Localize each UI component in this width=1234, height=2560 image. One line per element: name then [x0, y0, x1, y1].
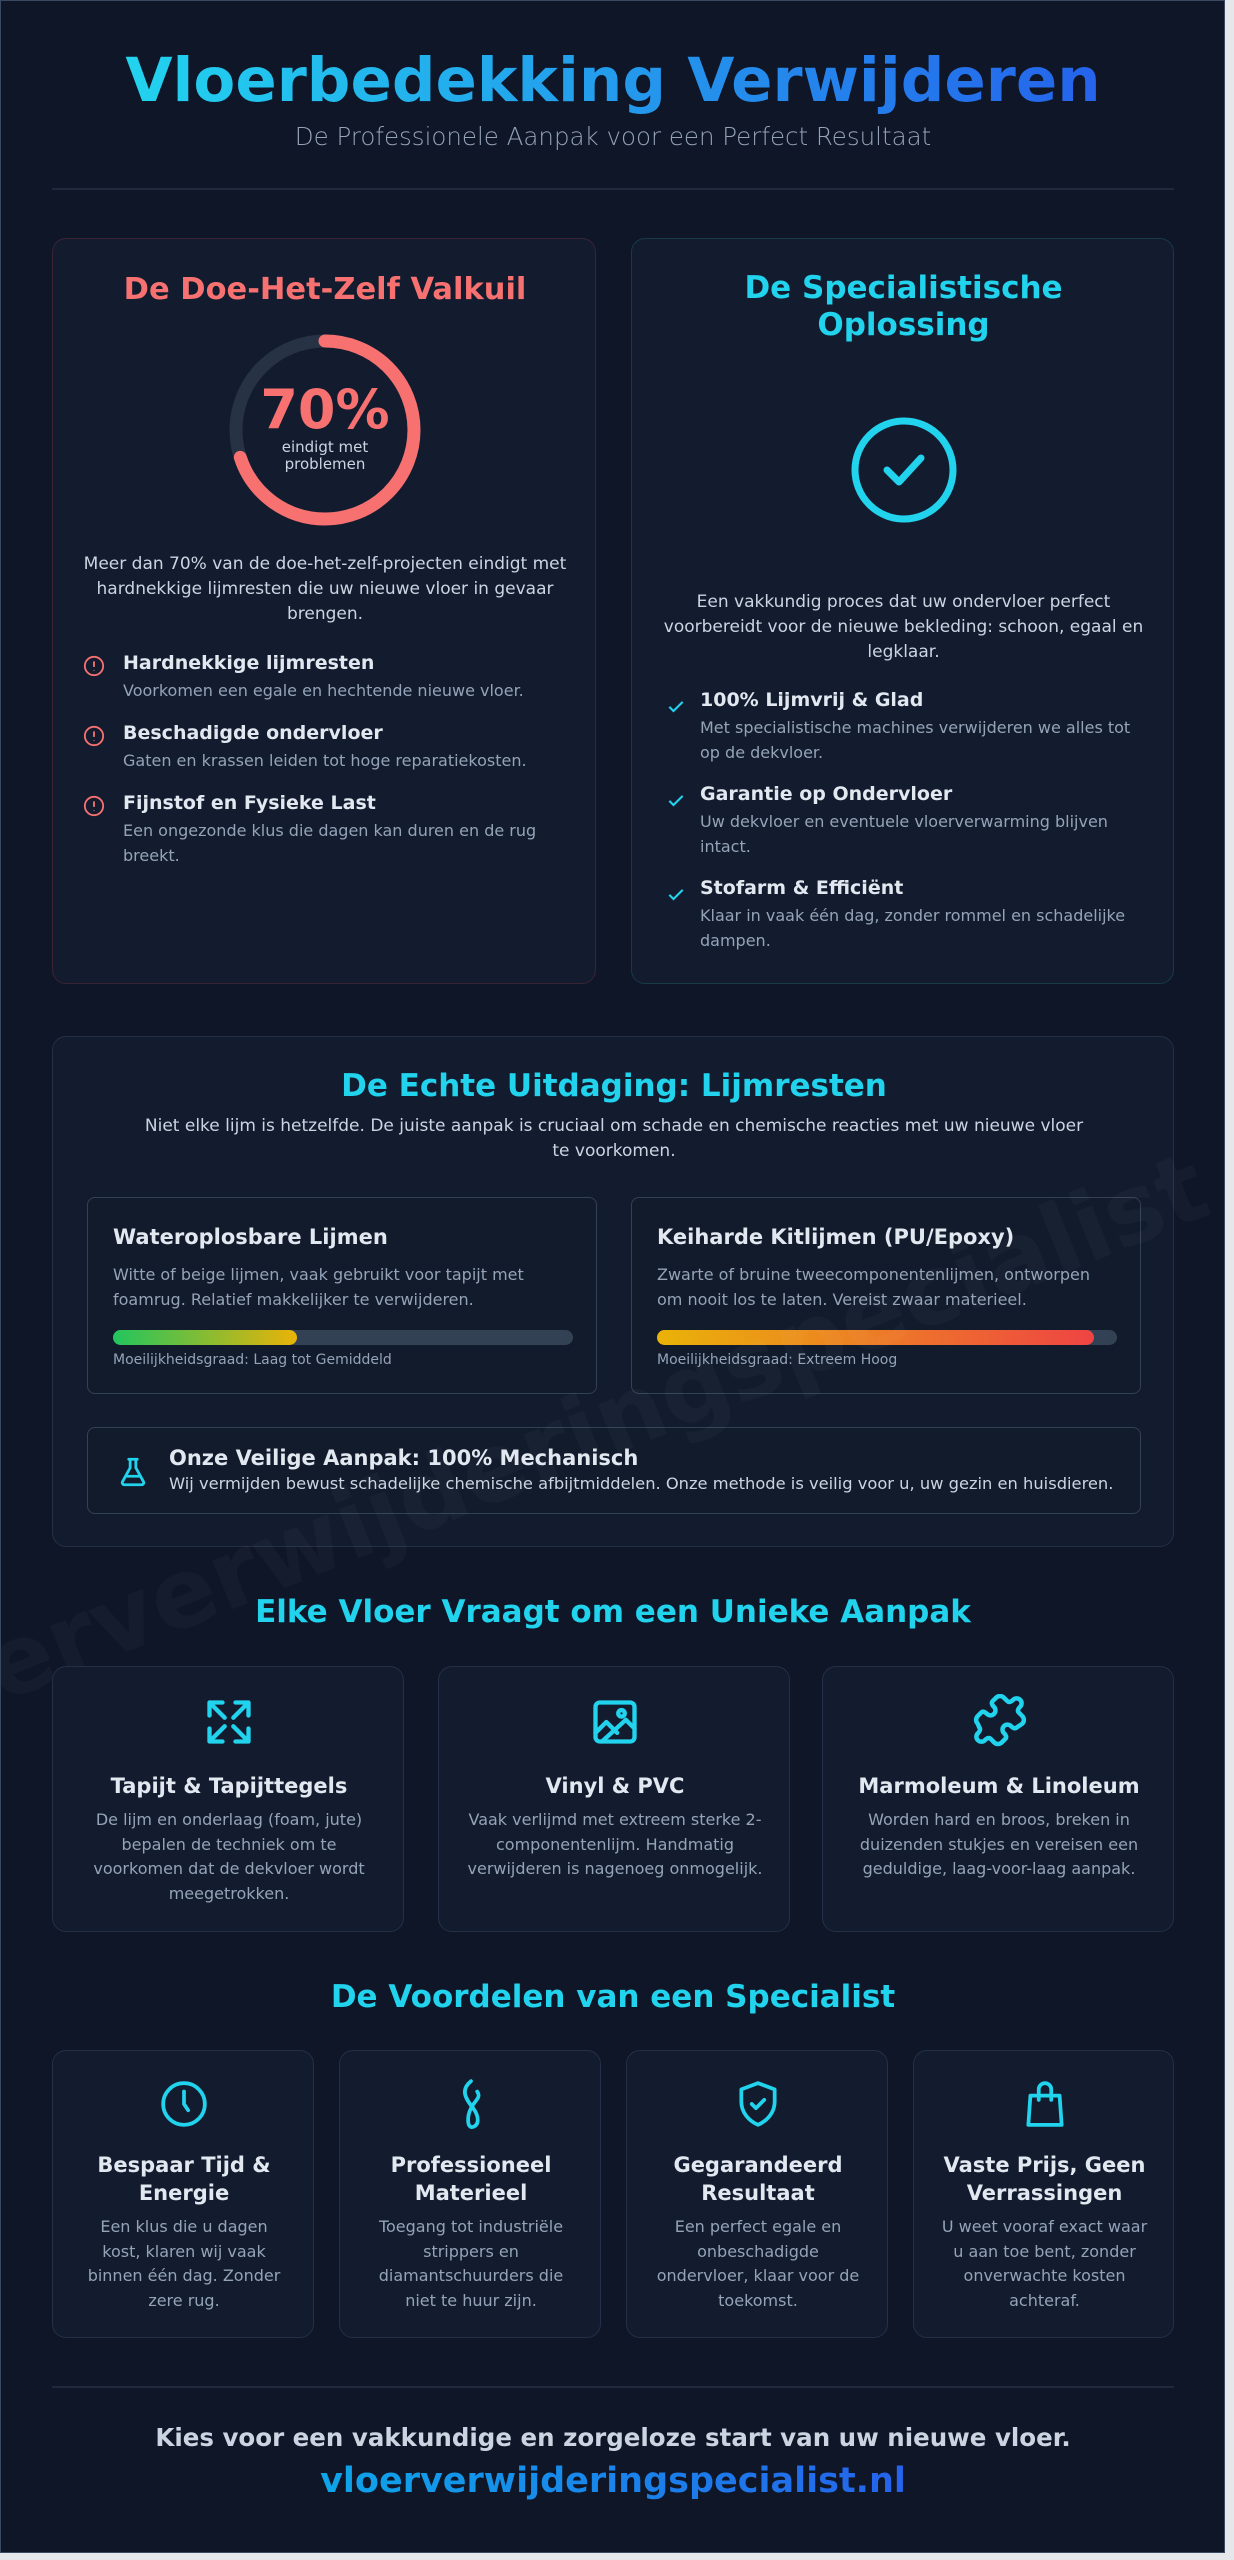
card: prijs: u aan toe bent, zonder — [953, 2242, 1136, 2260]
callout: mechanical approach: Onze Veilige Aanpak: 100% Mechanisch — [169, 1446, 638, 1470]
card: prijs: Vaste Prijs, Geen — [944, 2153, 1145, 2177]
list: DIY problems: Fijnstof en Fysieke Last — [123, 792, 376, 814]
card: tijd: Bespaar Tijd & — [97, 2153, 271, 2177]
card: vinyl: Vinyl & PVC — [546, 1774, 684, 1798]
card: resultaat: Een perfect egale en — [675, 2217, 841, 2236]
card: materieel: niet te huur zijn. — [405, 2290, 537, 2310]
icon: shopping bag — [1026, 2081, 1064, 2127]
bar: extreme difficulty — [657, 1330, 1117, 1345]
chart: 70% ring: 70% — [260, 378, 390, 441]
card: materieel: diamantschuurders die — [379, 2266, 563, 2285]
list: benefits: Garantie op Ondervloer — [700, 783, 952, 805]
card: tijd: binnen één dag. Zonder — [88, 2266, 280, 2285]
list: benefits: 100% Lijmvrij & Glad — [700, 689, 923, 711]
icon: tool — [463, 2079, 480, 2129]
icon: check circle — [852, 418, 956, 522]
card: water-soluble: Moeilijkheidsgraad: Laag tot Gemiddeld — [113, 1352, 392, 1368]
icon: flask — [120, 1458, 146, 1486]
card: materieel: Materieel — [415, 2181, 527, 2205]
panel: DIY pitfall — [52, 238, 596, 984]
panel: specialist solution — [631, 238, 1174, 984]
item: stofarm — [668, 877, 1125, 950]
list: benefits: Met specialistische machines verwijderen we alles tot op de dekvloer. — [700, 718, 1130, 762]
card: prijs: onverwachte kosten — [964, 2266, 1125, 2285]
list: benefits — [668, 689, 1130, 950]
item: lijmvrij — [668, 689, 1130, 762]
card: materieel — [339, 2050, 601, 2338]
card: marmoleum: Marmoleum & Linoleum — [858, 1774, 1140, 1798]
footer tagline: Kies voor een vakkundige en zorgeloze start van uw nieuwe vloer. — [155, 2423, 1071, 2452]
subtitle: De Professionele Aanpak voor een Perfect Resultaat — [295, 122, 931, 151]
item: fijnstof — [84, 792, 536, 865]
card: marmoleum: Worden hard en broos, breken in duizenden stukjes en vereisen een geduldige, laag-voor-laag aanpak. — [860, 1810, 1138, 1878]
list: DIY problems: Gaten en krassen leiden tot hoge reparatiekosten. — [123, 751, 527, 770]
card: tijd: kost, klaren wij vaak — [102, 2242, 266, 2260]
card: materieel: Professioneel — [391, 2153, 551, 2177]
chart: 70% ring — [230, 334, 420, 526]
card: tijd — [52, 2050, 314, 2338]
card: tijd: Een klus die u dagen — [100, 2217, 268, 2236]
card: vinyl: Vaak verlijmd met extreem sterke 2-componentenlijm. Handmatig verwijderen is nagenoeg onmogelijk. — [468, 1810, 762, 1878]
card: resultaat: onbeschadigde — [697, 2242, 819, 2260]
card: PU/epoxy: Keiharde Kitlijmen (PU/Epoxy) — [657, 1225, 1014, 1249]
card: resultaat — [626, 2050, 888, 2338]
card: prijs — [913, 2050, 1174, 2338]
card: PU/epoxy: Zwarte of bruine tweecomponentenlijmen, ontworpen om nooit los te laten. Vereist zwaar materieel. — [657, 1265, 1090, 1309]
list: benefits: Klaar in vaak één dag, zonder rommel en schadelijke dampen. — [700, 906, 1125, 950]
icon: clock — [161, 2081, 207, 2127]
card: water-soluble: Witte of beige lijmen, vaak gebruikt voor tapijt met foamrug. Relatief makkelijker te verwijderen. — [113, 1265, 524, 1309]
card: prijs: U weet vooraf exact waar — [942, 2217, 1147, 2236]
title: Vloerbedekking Verwijderen — [125, 45, 1101, 116]
heading: solution: Oplossing — [817, 307, 990, 343]
list: benefits: Uw dekvloer en eventuele vloerverwarming blijven intact. — [700, 812, 1108, 856]
heading: DIY: De Doe-Het-Zelf Valkuil — [124, 272, 526, 307]
list: DIY problems: Hardnekkige lijmresten — [123, 652, 374, 674]
card: water-soluble: Wateroplosbare Lijmen — [113, 1225, 388, 1249]
card: tapijt — [52, 1666, 404, 1932]
footer url: vloerverwijderingspecialist.nl — [320, 2461, 906, 2501]
callout: mechanical approach — [87, 1427, 1141, 1514]
chart: 70% ring: eindigt met — [282, 438, 368, 456]
heading: solution: De Specialistische — [744, 270, 1063, 306]
card: tijd: Energie — [139, 2181, 229, 2205]
list: benefits: Stofarm & Efficiënt — [700, 877, 903, 899]
item: garantie — [668, 783, 1108, 856]
heading: lijmresten: De Echte Uitdaging: Lijmresten — [341, 1068, 887, 1104]
icon: expand arrows — [207, 1700, 251, 1744]
item: lijmresten — [84, 652, 524, 700]
callout: mechanical approach: Wij vermijden bewust schadelijke chemische afbijtmiddelen. Onze methode is veilig voor u, uw gezin en huisdieren. — [169, 1474, 1113, 1493]
heading: floor types: Elke Vloer Vraagt om een Unieke Aanpak — [255, 1594, 971, 1630]
chart: 70% ring: problemen — [285, 455, 365, 473]
card: marmoleum — [822, 1666, 1174, 1932]
card: resultaat: toekomst. — [718, 2290, 798, 2310]
card: tapijt: De lijm en onderlaag (foam, jute) bepalen de techniek om te voorkomen dat de dekvloer wordt meegetrokken. — [93, 1810, 365, 1902]
card: prijs: achteraf. — [1009, 2290, 1080, 2310]
heading: solution — [744, 270, 1063, 343]
list: DIY problems: Beschadigde ondervloer — [123, 722, 383, 744]
card: materieel: Toegang tot industriële — [379, 2217, 563, 2236]
panel: adhesive challenge — [52, 1036, 1174, 1547]
card: tapijt: Tapijt & Tapijttegels — [111, 1774, 347, 1798]
card: tijd: zere rug. — [148, 2290, 220, 2310]
card: materieel: strippers en — [423, 2242, 519, 2260]
list: DIY problems: Voorkomen een egale en hechtende nieuwe vloer. — [123, 681, 524, 700]
text: intro: Niet elke lijm is hetzelfde. De juiste aanpak is cruciaal om schade en chemische reacties met uw nieuwe vloer te voorkomen. — [145, 1116, 1083, 1161]
text: solution intro: Een vakkundig proces dat uw ondervloer perfect voorbereidt voor de nieuwe bekleding: schoon, egaal en legklaar. — [664, 592, 1143, 662]
card: vinyl — [438, 1666, 790, 1932]
card: water-soluble — [87, 1197, 597, 1394]
card: prijs: Verrassingen — [967, 2181, 1122, 2205]
card: resultaat: Gegarandeerd — [673, 2153, 843, 2177]
icon: image — [593, 1700, 637, 1744]
list: DIY problems: Een ongezonde klus die dagen kan duren en de rug breekt. — [123, 821, 536, 865]
card: resultaat: Resultaat — [701, 2181, 815, 2205]
heading: advantages: De Voordelen van een Specialist — [331, 1979, 895, 2015]
bar: low difficulty — [113, 1330, 573, 1345]
text: DIY intro: Meer dan 70% van de doe-het-zelf-projecten eindigt met hardnekkige lijmresten die uw nieuwe vloer in gevaar brengen. — [84, 554, 566, 624]
list: DIY problems — [84, 652, 536, 865]
icon: puzzle — [974, 1694, 1026, 1746]
card: PU/epoxy: Moeilijkheidsgraad: Extreem Hoog — [657, 1352, 897, 1368]
item: ondervloer — [84, 722, 527, 770]
card: PU/epoxy — [631, 1197, 1141, 1394]
icon: shield check — [739, 2081, 777, 2127]
card: resultaat: ondervloer, klaar voor de — [657, 2266, 859, 2285]
